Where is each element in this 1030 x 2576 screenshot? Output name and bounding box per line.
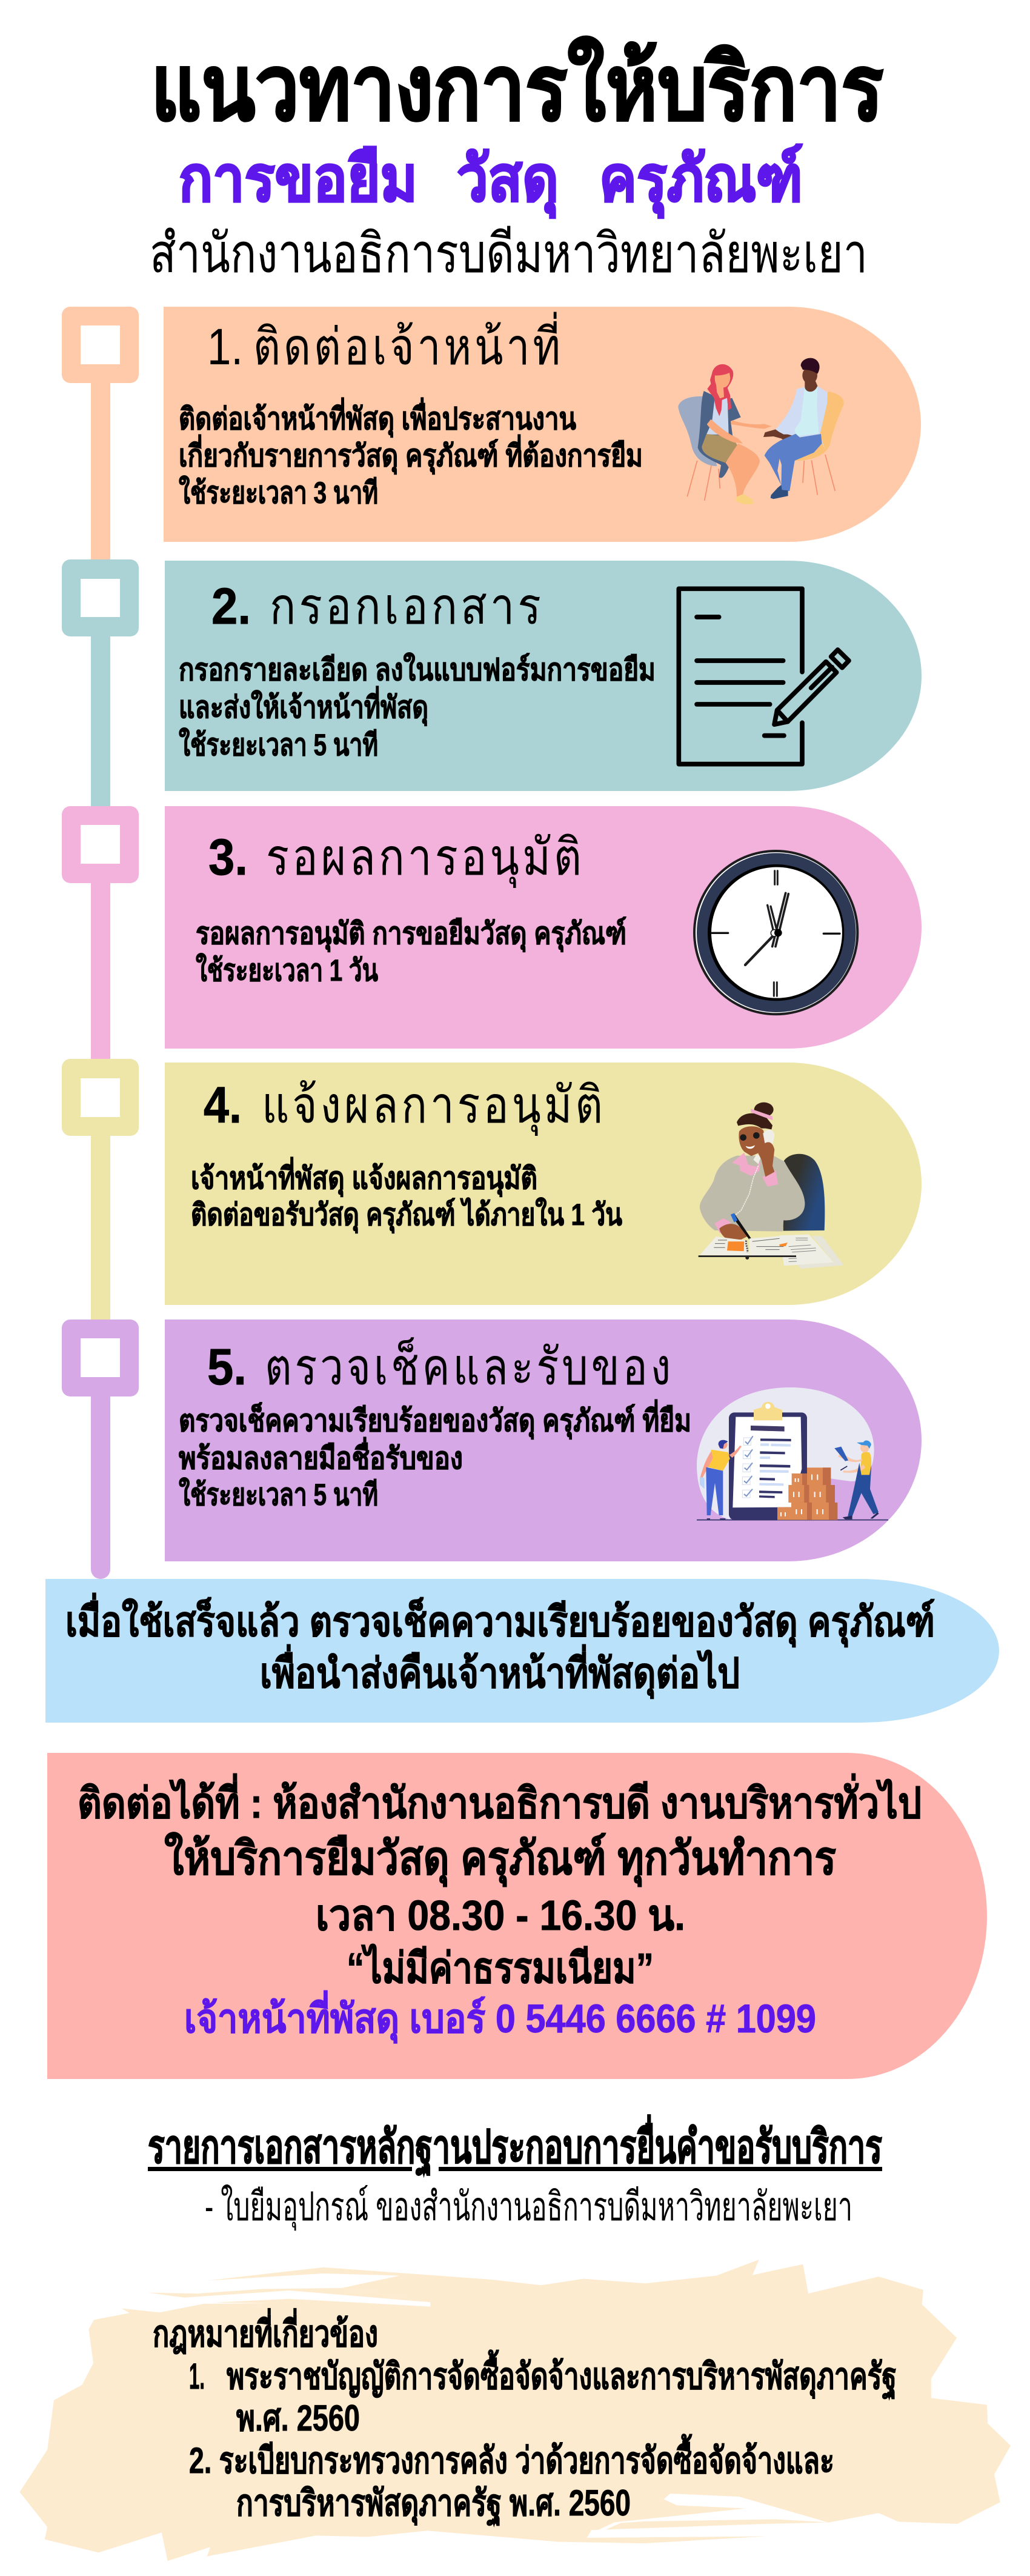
icon: wall clock: [693, 850, 859, 1015]
timeline marker 2: [62, 559, 139, 810]
step 4 heading: แจ้งผลการอนุมัติ: [262, 1076, 606, 1136]
subtitle: loan of supplies: [179, 144, 803, 218]
panel: contact details: ติดต่อได้ที่ : ห้องสำนักงานอธิการบดี งานบริหารทั่วไป: [78, 1773, 922, 1827]
step 2 description: ใช้ระยะเวลา 5 นาที: [179, 727, 378, 762]
step 1 description: ติดต่อเจ้าหน้าที่พัสดุ เพื่อประสานงาน: [179, 398, 576, 438]
step 1 description: เกี่ยวกับรายการวัสดุ ครุภัณฑ์ ที่ต้องการยืม: [179, 435, 643, 475]
brush stroke background: [20, 2260, 1011, 2561]
timeline marker 1: [62, 307, 139, 564]
laws heading: กฎหมายที่เกี่ยวข้อง: [153, 2308, 378, 2354]
step 3 heading: รอผลการอนุมัติ: [266, 829, 585, 889]
subtitle: loan of supplies: วัสดุ: [457, 144, 559, 218]
step 1 heading: ติดต่อเจ้าหน้าที่: [253, 312, 563, 375]
step 1 description: ใช้ระยะเวลา 3 นาที: [179, 475, 378, 510]
timeline marker 5: [62, 1320, 139, 1579]
step 2 description: กรอกรายละเอียด ลงในแบบฟอร์มการขอยืม: [179, 652, 656, 687]
panel: contact details: เจ้าหน้าที่พัสดุ เบอร์ 0 5446 6666 # 1099: [184, 1990, 816, 2044]
step 2 heading: 2.: [211, 578, 251, 635]
step 5 description: ใช้ระยะเวลา 5 นาที: [179, 1477, 378, 1512]
office name: สำนักงานอธิการบดีมหาวิทยาลัยพะเยา: [150, 224, 868, 284]
icon: officer on the phone at desk: [699, 1103, 844, 1269]
icon: two people talking on chairs: [678, 358, 844, 504]
step 4 description: ติดต่อขอรับวัสดุ ครุภัณฑ์ ได้ภายใน 1 วัน: [191, 1197, 622, 1233]
panel: step 1: [164, 307, 921, 542]
title: แนวทางการให้บริการ: [151, 36, 883, 139]
step 5 description: [179, 1400, 691, 1512]
panel: step 5: [165, 1320, 922, 1561]
step 3 description: ใช้ระยะเวลา 1 วัน: [196, 953, 378, 987]
step 2 description: [179, 652, 656, 762]
step 1 description: [179, 398, 643, 510]
step 2 heading: กรอกเอกสาร: [270, 578, 544, 635]
panel: contact details: เวลา 08.30 - 16.30 น.: [316, 1892, 685, 1939]
step 5 heading: ตรวจเช็คและรับของ: [265, 1337, 674, 1395]
panel: return reminder: [45, 1579, 999, 1723]
panel: contact details: “ไม่มีค่าธรรมเนียม”: [347, 1943, 654, 1992]
step 3 description: [196, 916, 626, 987]
step 5 description: พร้อมลงลายมือชื่อรับของ: [179, 1437, 463, 1475]
panel: return reminder: เพื่อนำส่งคืนเจ้าหน้าที่พัสดุต่อไป: [260, 1644, 740, 1699]
law 1: [189, 2349, 897, 2438]
subtitle: loan of supplies: การขอยืม: [179, 144, 417, 215]
panel: step 2: [165, 561, 922, 791]
panel: step 4: [165, 1063, 922, 1305]
law 2: [189, 2434, 834, 2526]
subtitle: loan of supplies: ครุภัณฑ์: [599, 144, 803, 218]
law 2: การบริหารพัสดุภาครัฐ พ.ศ. 2560: [236, 2483, 631, 2526]
step 4 heading: 4.: [204, 1076, 242, 1133]
step 3 heading: 3.: [208, 829, 248, 886]
timeline marker 4: [62, 1059, 139, 1323]
step 4 description: [191, 1157, 622, 1233]
panel: contact details: [47, 1753, 987, 2079]
icon: checklist, boxes and workers: [697, 1387, 888, 1520]
step 5 heading: 5.: [207, 1338, 247, 1395]
step 2 description: และส่งให้เจ้าหน้าที่พัสดุ: [179, 686, 428, 726]
icon: document with pencil: [679, 589, 849, 764]
panel: step 3: [165, 806, 922, 1049]
step 1 heading: 1.: [207, 318, 243, 375]
panel: related laws: [20, 2260, 1011, 2561]
step 1 heading: [207, 312, 563, 375]
law 1: 1.: [189, 2356, 205, 2397]
panel: contact details: ให้บริการยืมวัสดุ ครุภัณฑ์ ทุกวันทำการ: [164, 1832, 836, 1887]
step 3 description: รอผลการอนุมัติ การขอยืมวัสดุ ครุภัณฑ์: [196, 916, 626, 952]
law 1: พ.ศ. 2560: [236, 2398, 360, 2438]
step 4 description: เจ้าหน้าที่พัสดุ แจ้งผลการอนุมัติ: [191, 1157, 537, 1197]
timeline marker 3: [62, 806, 139, 1061]
step 5 description: ตรวจเช็คความเรียบร้อยของวัสดุ ครุภัณฑ์ ที่ยืม: [179, 1400, 691, 1440]
